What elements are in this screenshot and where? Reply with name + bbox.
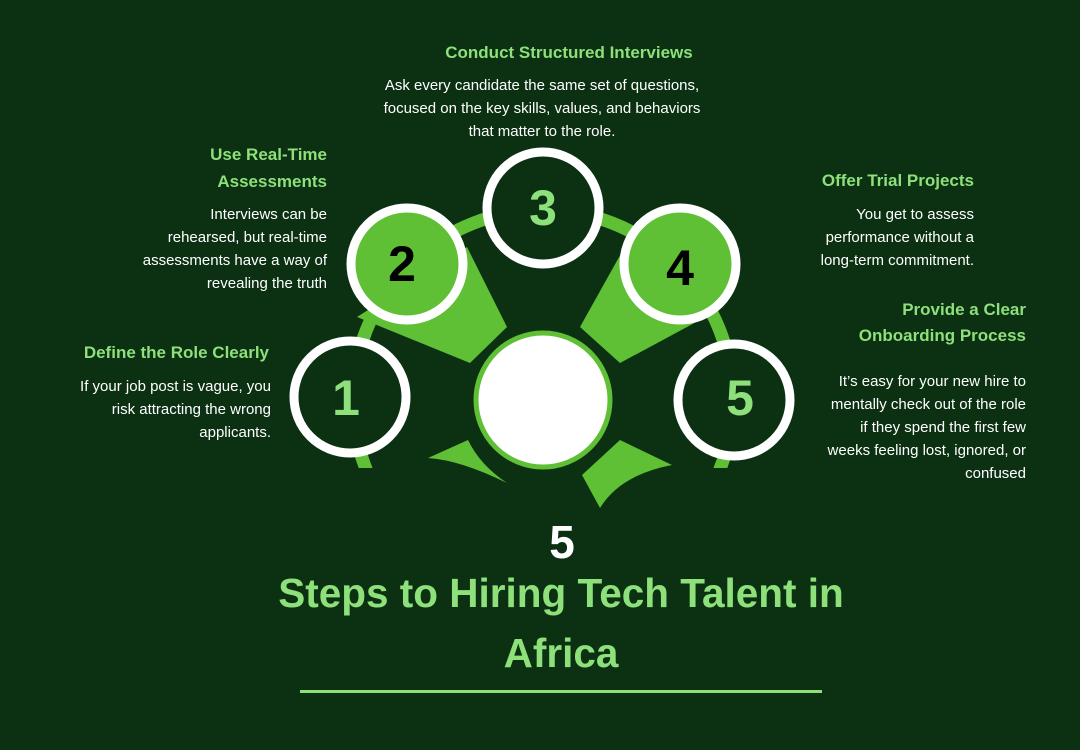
circle 5 xyxy=(678,344,790,456)
title: Africa xyxy=(504,630,619,676)
text: step 4: long-term commitment. xyxy=(821,252,974,269)
text: step 1: applicants. xyxy=(199,424,271,441)
text: step 5: confused xyxy=(965,465,1026,482)
wedge right xyxy=(580,250,700,363)
text: step 5: It’s easy for your new hire to xyxy=(839,373,1026,390)
text: step 2 xyxy=(143,145,328,292)
text: step 2: Use Real-Time xyxy=(210,145,327,164)
text: step 5: Onboarding Process xyxy=(859,326,1026,345)
title: Steps to Hiring Tech Talent in xyxy=(278,570,844,616)
text: step 5: weeks feeling lost, ignored, or xyxy=(827,442,1026,459)
text: step 4: Offer Trial Projects xyxy=(822,171,974,190)
text: step 5: mentally check out of the role xyxy=(831,396,1026,413)
circle 2: 2 xyxy=(388,236,416,292)
title xyxy=(278,516,844,676)
circle 4 xyxy=(624,208,736,320)
circle 5: 5 xyxy=(726,370,754,426)
text: step 4 xyxy=(821,171,975,269)
wedge bottom left xyxy=(428,440,507,483)
text: step 2: rehearsed, but real-time xyxy=(168,229,327,246)
text: step 4: You get to assess xyxy=(856,206,974,223)
circle 4: 4 xyxy=(666,240,694,296)
circle 1: 1 xyxy=(332,370,360,426)
text: step 5: Provide a Clear xyxy=(902,300,1026,319)
text: step 4: performance without a xyxy=(826,229,975,246)
text: step 5: if they spend the first few xyxy=(860,419,1026,436)
text: step 2: assessments have a way of xyxy=(143,252,328,269)
circle 1 xyxy=(294,341,406,453)
text: step 3 xyxy=(384,43,700,140)
circle 3 xyxy=(487,152,599,264)
text: step 3: Ask every candidate the same set of questions, xyxy=(385,77,699,94)
text: step 2: Assessments xyxy=(217,172,327,191)
wedge bottom right xyxy=(582,440,672,508)
wedge left xyxy=(357,247,507,363)
center circle xyxy=(476,333,610,467)
title: 5 xyxy=(549,516,575,568)
text: step 3: that matter to the role. xyxy=(469,123,615,140)
text: step 3: Conduct Structured Interviews xyxy=(445,43,693,62)
text: step 5 xyxy=(827,300,1026,482)
ring arc xyxy=(355,213,730,468)
circle 3: 3 xyxy=(529,180,557,236)
circle 2 xyxy=(351,208,463,320)
text: step 2: Interviews can be xyxy=(210,206,327,223)
text: step 1 xyxy=(80,343,271,441)
text: step 1: risk attracting the wrong xyxy=(112,401,271,418)
text: step 1: Define the Role Clearly xyxy=(84,343,270,362)
text: step 3: focused on the key skills, values, and behaviors xyxy=(384,100,700,117)
text: step 1: If your job post is vague, you xyxy=(80,378,271,395)
text: step 2: revealing the truth xyxy=(207,275,327,292)
